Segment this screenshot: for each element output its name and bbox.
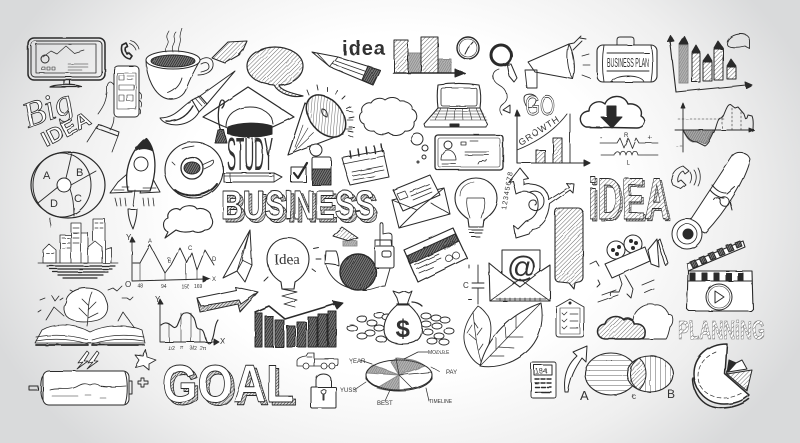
icon: city skyline [38,218,118,278]
capacitor symbol: C [463,281,469,290]
line chart ABCD: X [212,277,216,283]
word: goal 3D: GOAL [162,355,294,414]
growth chart [515,110,590,166]
icon: telephone [121,41,139,59]
icon: money bag with coins [347,291,454,345]
icon: lightning [77,351,99,369]
icon: idea bulb [264,238,321,307]
pie chart 3D with labels: BEST [377,401,393,407]
pie diagram ABCD: C [74,193,82,205]
word: business 3D: BUSINESS [224,185,378,231]
line chart ABCD: Y [126,233,132,242]
wave graph: 3/2 [190,346,197,352]
wave graph: 1/2 [168,346,175,352]
icon: calculator: 184 [535,366,548,376]
icon: pie chart 3D [693,344,752,408]
icon: coffee cup [146,28,213,99]
pie chart 3D with labels: MODULE [428,350,450,356]
icon: credit card: 0256 [442,240,458,252]
pie chart 3D with labels: PAY [446,370,457,376]
icon: cloud download [580,96,645,128]
icon: diploma scroll [672,152,750,249]
circuit diagram: - [600,135,603,142]
wave graph: Y [155,295,161,304]
text: STUDY [227,128,273,180]
word: idea hatched: iDEA [590,169,671,234]
icon: plus [138,378,148,387]
icon: paintbrush [160,71,235,125]
line chart ABCD: D [212,257,217,263]
circuit diagram [600,133,658,167]
word: big idea [17,81,95,151]
icon: paper plane [223,230,252,282]
venn diagram: B [667,387,675,401]
line chart ABCD: C [188,246,193,252]
icon: leaves [464,303,542,367]
pie diagram ABCD: D [50,198,58,210]
icon: battery [29,371,132,405]
stacked hatched shape [333,227,358,246]
wave graph: X [220,337,226,346]
speech cloud small [164,206,213,238]
icon: open envelope with card [392,175,450,228]
icon: checkbox [291,163,307,182]
line chart ABCD: A [148,239,152,245]
icon: at-sign envelope: @ [507,251,537,284]
icon: star [135,350,156,370]
icon: graduation cap [203,87,294,143]
icon: curly phone signal [671,166,700,189]
circuit diagram: + [648,135,652,142]
icon: hand holding smartphone [87,66,142,152]
icon: film projector [590,235,668,302]
word: big idea: Big [17,81,78,136]
icon: monitor [28,38,105,87]
icon: megaphone top right [524,36,590,107]
wave graph: 2π [200,346,207,352]
pie chart 3D with labels: YEAR [349,359,366,365]
text: BUSINESS PLAN [607,55,649,70]
icon: clock [457,37,479,59]
icon: ID card [435,135,503,170]
word: idea hatched: iDEA [588,167,669,232]
icon: idea bulb: Idea [274,252,300,268]
pie chart 3D with labels: TIMELINE [429,399,453,405]
line chart ABCD: 94 [161,284,167,290]
word: go: GO [525,90,555,121]
icon: money bag with coins: $ [396,315,410,343]
line chart ABCD: 150 [181,284,190,290]
venn diagram: A [580,388,589,403]
icon: film clapper [687,241,753,311]
icon: arrow 3D [197,287,258,312]
wave graph [155,295,226,352]
icon: business plan briefcase [597,37,657,82]
icon: light bulb [455,178,497,237]
icon: hatched arrow [212,41,247,63]
icon: at-sign envelope [489,250,550,301]
capacitor symbol [463,265,484,304]
pie chart 3D with labels [340,350,457,407]
icon: calculator [531,362,556,398]
line chart ABCD: 48 [138,284,144,290]
icon: calendar [342,144,389,185]
word: big idea: IDEA [38,107,95,151]
word: business 3D: BUSINESS [221,182,375,228]
icon: magnifying glass with wire [491,45,517,115]
icon: arrows with numbers: 12345678 [501,171,515,210]
line chart ABCD: 169 [194,284,203,290]
open book with tree [35,286,145,345]
tall hatched speech bubble [555,208,583,289]
wave graph: π [180,345,184,351]
icon: hatched speech bubble [247,47,303,97]
bar chart with trend arrow [255,301,343,347]
pie diagram ABCD [31,152,105,218]
word: idea hatched [588,167,671,234]
icon: coffee on plate [165,142,223,198]
line graph with shaded area [675,103,754,152]
icon: rocket [110,138,160,229]
icon: padlock [311,374,336,408]
word: idea with pencil: idea [342,38,386,60]
icon: clouds [598,304,673,339]
growth chart: GROWTH [517,114,561,148]
circuit diagram: R [624,133,629,139]
bar chart with triangles [668,34,752,92]
line chart ABCD: B [167,258,171,264]
coins [347,312,454,345]
icon: arrows with numbers [501,168,574,238]
pencil [312,52,380,85]
pie diagram ABCD: B [76,167,83,179]
icon: credit card [404,228,467,282]
icon: checklist tag [556,299,584,337]
venn diagram: c [632,392,636,401]
icon: hand with wallet and hatched circle [325,223,394,290]
line chart ABCD: O [125,280,131,289]
venn diagram [580,353,675,403]
word: goal 3D: GOAL [165,358,297,417]
bar chart: hatched [393,37,465,77]
word: idea with pencil [312,38,386,85]
icon: megaphone with person [288,85,354,185]
icon: curved up arrow [565,346,587,392]
line chart ABCD [125,233,217,290]
speech cloud with thought bubbles [346,97,428,163]
pie diagram ABCD: A [43,170,51,182]
icon: truck [297,353,338,369]
icon: small pencil [224,173,282,182]
circuit diagram: L [627,161,631,167]
pie chart 3D with labels: YUSS [340,388,356,394]
icon: laptop [424,84,487,127]
